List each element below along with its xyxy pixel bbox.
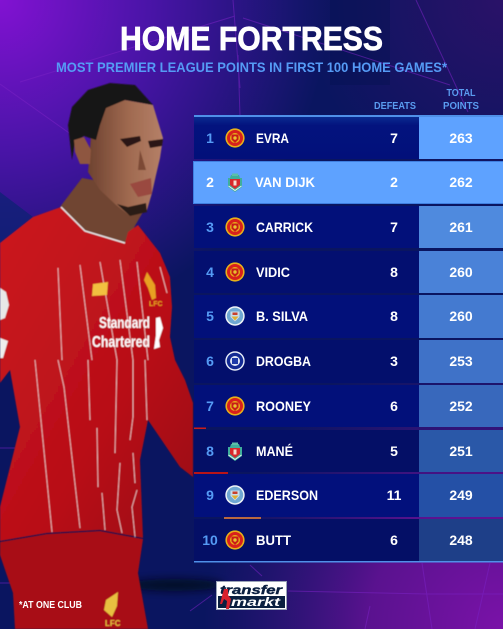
row 10: 6 [390, 532, 398, 548]
collar [61, 207, 125, 243]
neck [60, 178, 150, 243]
row 8: 5 [390, 443, 398, 459]
shorts LFC crest [104, 592, 121, 628]
title: HOME FORTRESS [120, 20, 383, 57]
player photo [0, 83, 223, 629]
row 10: 248 [449, 532, 473, 548]
row 1: EVRA [256, 130, 289, 146]
subtitle: MOST PREMIER LEAGUE POINTS IN FIRST 100 HOME GAMES* [56, 59, 448, 75]
row 3: 7 [390, 219, 398, 235]
row 4: 4 [206, 264, 214, 280]
mouth [130, 178, 152, 197]
red shirt [0, 207, 193, 541]
shorts [0, 531, 148, 629]
row 8 [194, 430, 503, 472]
row 2 highlighted: VAN DIJK [255, 174, 315, 190]
hair [68, 83, 153, 160]
armband [0, 338, 8, 358]
table header: POINTS [443, 101, 479, 112]
liver bird crest [144, 272, 156, 300]
table top line [194, 115, 503, 117]
row 9: 249 [449, 487, 473, 503]
row 6: 3 [390, 353, 398, 369]
row 4: VIDIC [256, 264, 290, 280]
footnote: *AT ONE CLUB [19, 600, 82, 611]
row 10 [194, 519, 503, 561]
sponsor: Standard [99, 315, 150, 332]
row 7: 6 [390, 398, 398, 414]
row 8: 8 [206, 443, 214, 459]
transfermarkt logo [216, 582, 286, 610]
row 2 highlighted [194, 162, 503, 204]
table bottom line [194, 561, 503, 562]
row 4: 260 [449, 264, 473, 280]
row 1: 1 [206, 130, 214, 146]
row 10: 10 [202, 532, 218, 548]
beard [117, 203, 147, 216]
row 9: 11 [387, 487, 402, 503]
player figure [0, 83, 193, 629]
row 9: 9 [206, 487, 214, 503]
row 6: 6 [206, 353, 214, 369]
table header [374, 88, 479, 112]
row 2 highlighted: 2 [390, 174, 398, 190]
nose shadow [138, 150, 146, 170]
row 1: 7 [390, 130, 398, 146]
row 5: 8 [390, 308, 398, 324]
row 3: CARRICK [256, 219, 313, 235]
row 6: 253 [449, 353, 473, 369]
row 2 highlighted: 2 [206, 174, 214, 190]
row 9 [194, 474, 503, 517]
shadow under player [127, 579, 223, 591]
row 7: ROONEY [256, 398, 312, 414]
row 3: 3 [206, 219, 214, 235]
row 4: 8 [390, 264, 398, 280]
row 6: DROGBA [256, 353, 311, 369]
face [88, 100, 163, 216]
player figure: Chartered [92, 334, 150, 351]
row 4 [194, 251, 503, 293]
row 5: B. SILVA [256, 308, 308, 324]
row 2 highlighted: 262 [449, 174, 473, 190]
sleeve badge [0, 288, 9, 320]
transfermarkt logo: markt [231, 595, 281, 609]
row 1 [194, 117, 503, 159]
row 7 [194, 385, 503, 427]
ear [74, 137, 91, 164]
row 7: 252 [449, 398, 473, 414]
row 5: 260 [449, 308, 473, 324]
row 7: 7 [206, 398, 214, 414]
player figure: LFC [149, 301, 163, 308]
pinstripes [35, 260, 167, 537]
table header: DEFEATS [374, 101, 416, 112]
transfermarkt logo: transfer [220, 583, 284, 597]
row 6 [194, 340, 503, 383]
shorts LFC crest: LFC [105, 619, 121, 628]
row 10: BUTT [256, 532, 291, 548]
row 1: 263 [449, 130, 473, 146]
row 9: EDERSON [256, 487, 318, 503]
row 8: MANÉ [256, 443, 293, 459]
new balance logo [92, 282, 108, 296]
elbow slivers over table gaps [194, 428, 261, 519]
table header: TOTAL [446, 88, 476, 99]
row 3: 261 [449, 219, 473, 235]
row 8: 251 [449, 443, 473, 459]
brows and eyes [120, 136, 163, 148]
row 3 [194, 206, 503, 248]
row 5: 5 [206, 308, 214, 324]
row 5 [194, 295, 503, 338]
